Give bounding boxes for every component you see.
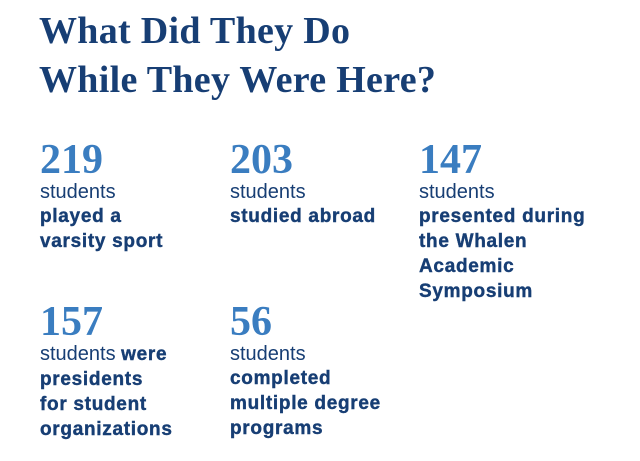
stat: symposium: 147 [419, 137, 482, 183]
title: While They Were Here? [39, 59, 436, 101]
stat: studied abroad: students [230, 181, 306, 203]
stat: studied abroad: studied abroad [230, 206, 376, 227]
stat: presidents: organizations [40, 419, 173, 440]
stat: studied abroad: 203 [230, 137, 293, 183]
stat: multiple degrees: multiple degree [230, 393, 381, 414]
stat: varsity sport [40, 137, 163, 252]
stat: presidents: for student [40, 394, 147, 415]
stat: multiple degrees: 56 [230, 299, 272, 345]
stat: symposium: Symposium [419, 281, 533, 302]
stat: varsity sport: students [40, 181, 116, 203]
stat: multiple degrees: completed [230, 368, 331, 389]
stat: multiple degrees [230, 299, 381, 439]
stat: symposium: students [419, 181, 495, 203]
stat: symposium: the Whalen [419, 231, 527, 252]
title [39, 10, 436, 101]
stat: varsity sport: 219 [40, 137, 103, 183]
stat: presidents [40, 299, 173, 440]
stat: symposium [419, 137, 585, 302]
stat: presidents: 157 [40, 299, 103, 345]
title: What Did They Do [39, 10, 350, 52]
stat: studied abroad [230, 137, 376, 227]
stat: presidents: presidents [40, 369, 143, 390]
stat: varsity sport: varsity sport [40, 231, 163, 252]
stat: symposium: Academic [419, 256, 514, 277]
stat: multiple degrees: students [230, 343, 306, 365]
stat: varsity sport: played a [40, 206, 122, 227]
stat: presidents: students were [40, 343, 167, 365]
stat: symposium: presented during [419, 206, 585, 227]
stat: multiple degrees: programs [230, 418, 323, 439]
